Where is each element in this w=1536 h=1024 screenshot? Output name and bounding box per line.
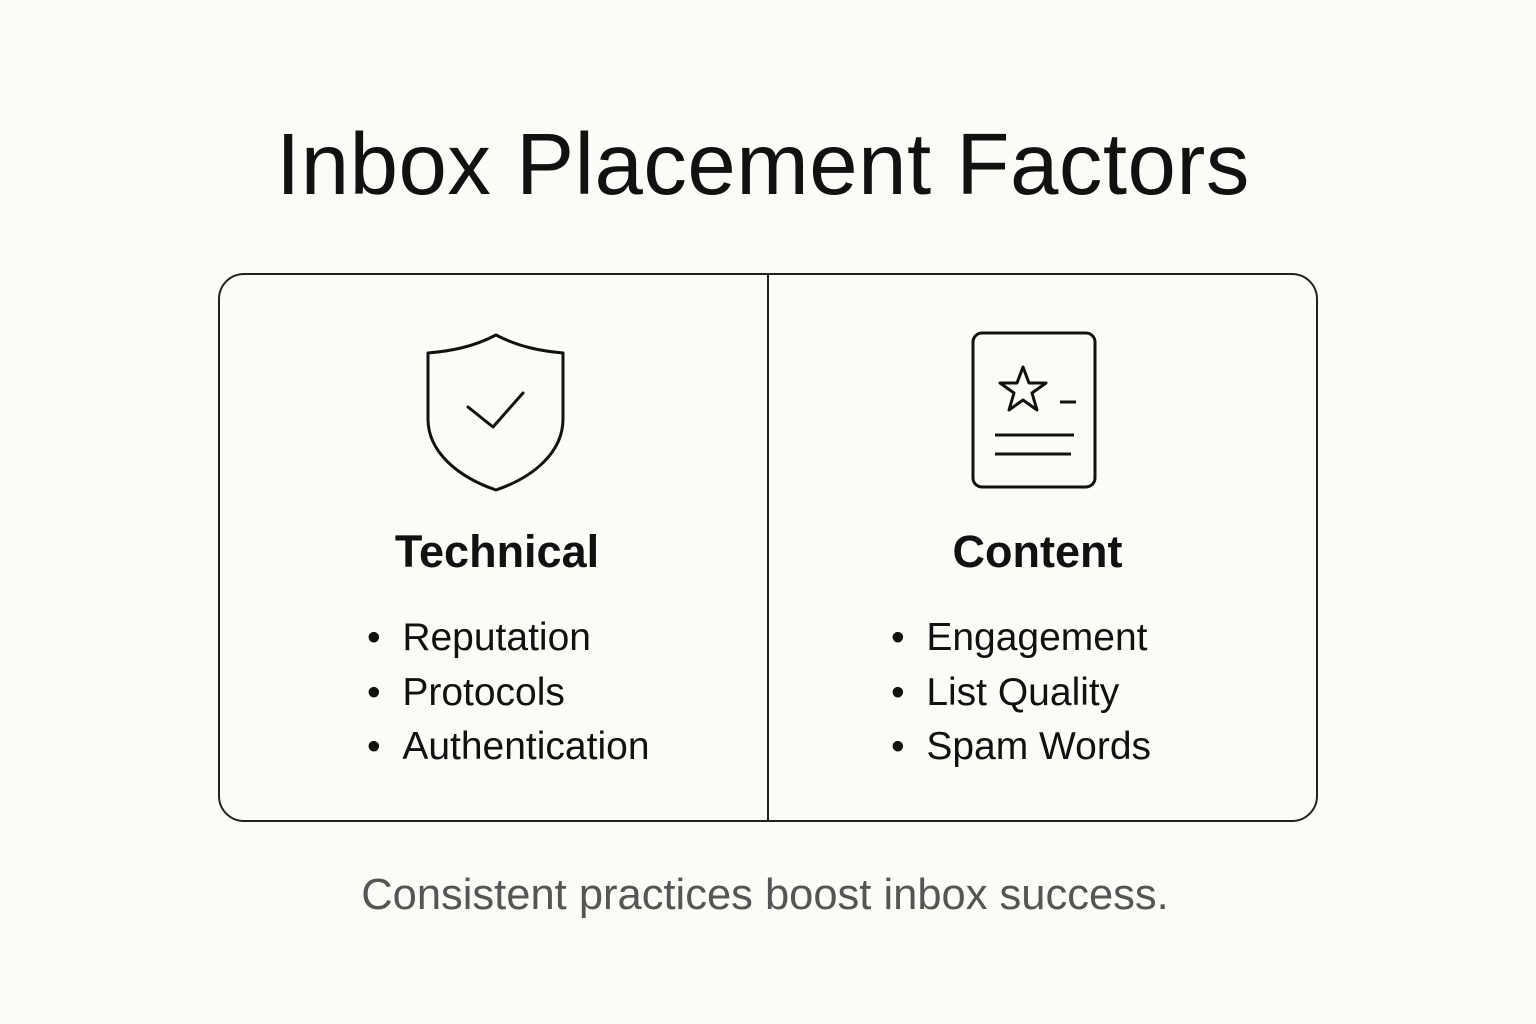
list: content factors: • Engagement xyxy=(891,616,1148,659)
list: content factors xyxy=(891,616,1151,768)
list: technical factors: • Protocols xyxy=(367,670,565,714)
heading: Content: Content xyxy=(953,526,1122,577)
list: technical factors xyxy=(367,616,650,768)
list: technical factors: • Reputation xyxy=(367,616,591,659)
list: content factors: • Spam Words xyxy=(891,725,1151,768)
panel: technical xyxy=(220,275,769,820)
list: content factors: • List Quality xyxy=(891,670,1119,714)
list: technical factors: • Authentication xyxy=(367,725,650,768)
icon: shield with check xyxy=(426,334,564,492)
panel: content xyxy=(891,332,1151,768)
icon: document with star xyxy=(972,332,1096,488)
panel: factors box xyxy=(218,273,1318,822)
title: Inbox Placement Factors xyxy=(276,116,1250,213)
heading: Technical: Technical xyxy=(395,526,599,577)
footer text: Consistent practices boost inbox success. xyxy=(361,871,1169,919)
